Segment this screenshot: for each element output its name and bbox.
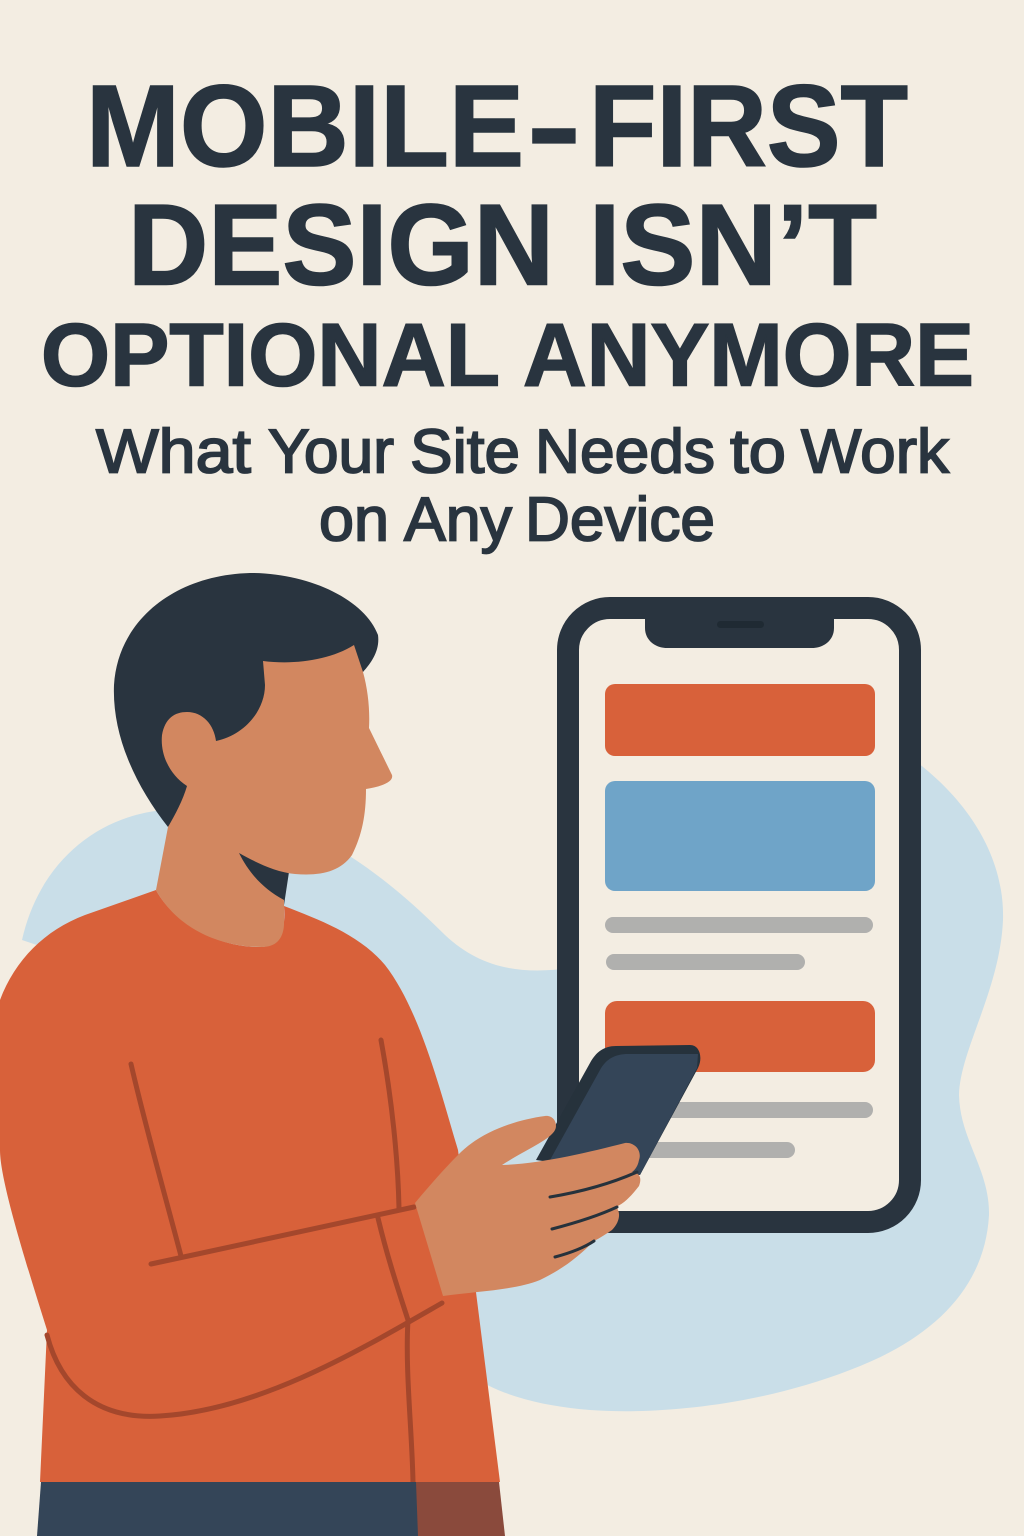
held phone screen [550,1054,698,1175]
subtitle [96,418,950,554]
subtitle: Device [525,486,715,554]
background blob [22,750,1003,1411]
hand holding phone [415,1045,700,1296]
title [41,61,974,404]
screen card: blue [605,781,875,891]
title: MOBILE [86,61,524,191]
title: ANYMORE [523,304,974,404]
title: - [527,61,581,191]
subtitle: Site [410,418,520,486]
text line [650,1102,873,1118]
jumper [0,890,500,1482]
hair [114,573,378,827]
text line [640,1142,795,1158]
subtitle: Your [268,418,394,486]
phone notch [645,618,834,648]
beard shadow under jaw [237,851,289,905]
trousers [37,1482,418,1536]
subtitle: to [730,418,786,486]
subtitle: Needs [535,418,715,486]
title: FIRST [589,61,908,191]
subtitle: Any [404,486,512,554]
held phone edge [536,1045,700,1175]
person [0,573,505,1536]
trouser shadow [416,1482,505,1536]
title: ISN’T [589,182,877,310]
phone mockup [568,608,910,1222]
head and neck [156,645,392,947]
subtitle: on [319,486,389,554]
sleeve fold lines [47,1040,442,1482]
text line [606,954,805,970]
screen card: orange lower [605,1001,875,1072]
phone speaker [717,621,764,628]
finger lines [550,1172,637,1257]
title: OPTIONAL [41,304,500,404]
subtitle: Work [801,418,950,486]
subtitle: What [96,418,251,486]
hand [415,1116,640,1296]
title: DESIGN [128,182,554,310]
text line [605,917,873,933]
screen card: orange [605,684,875,756]
phone body [568,608,910,1222]
